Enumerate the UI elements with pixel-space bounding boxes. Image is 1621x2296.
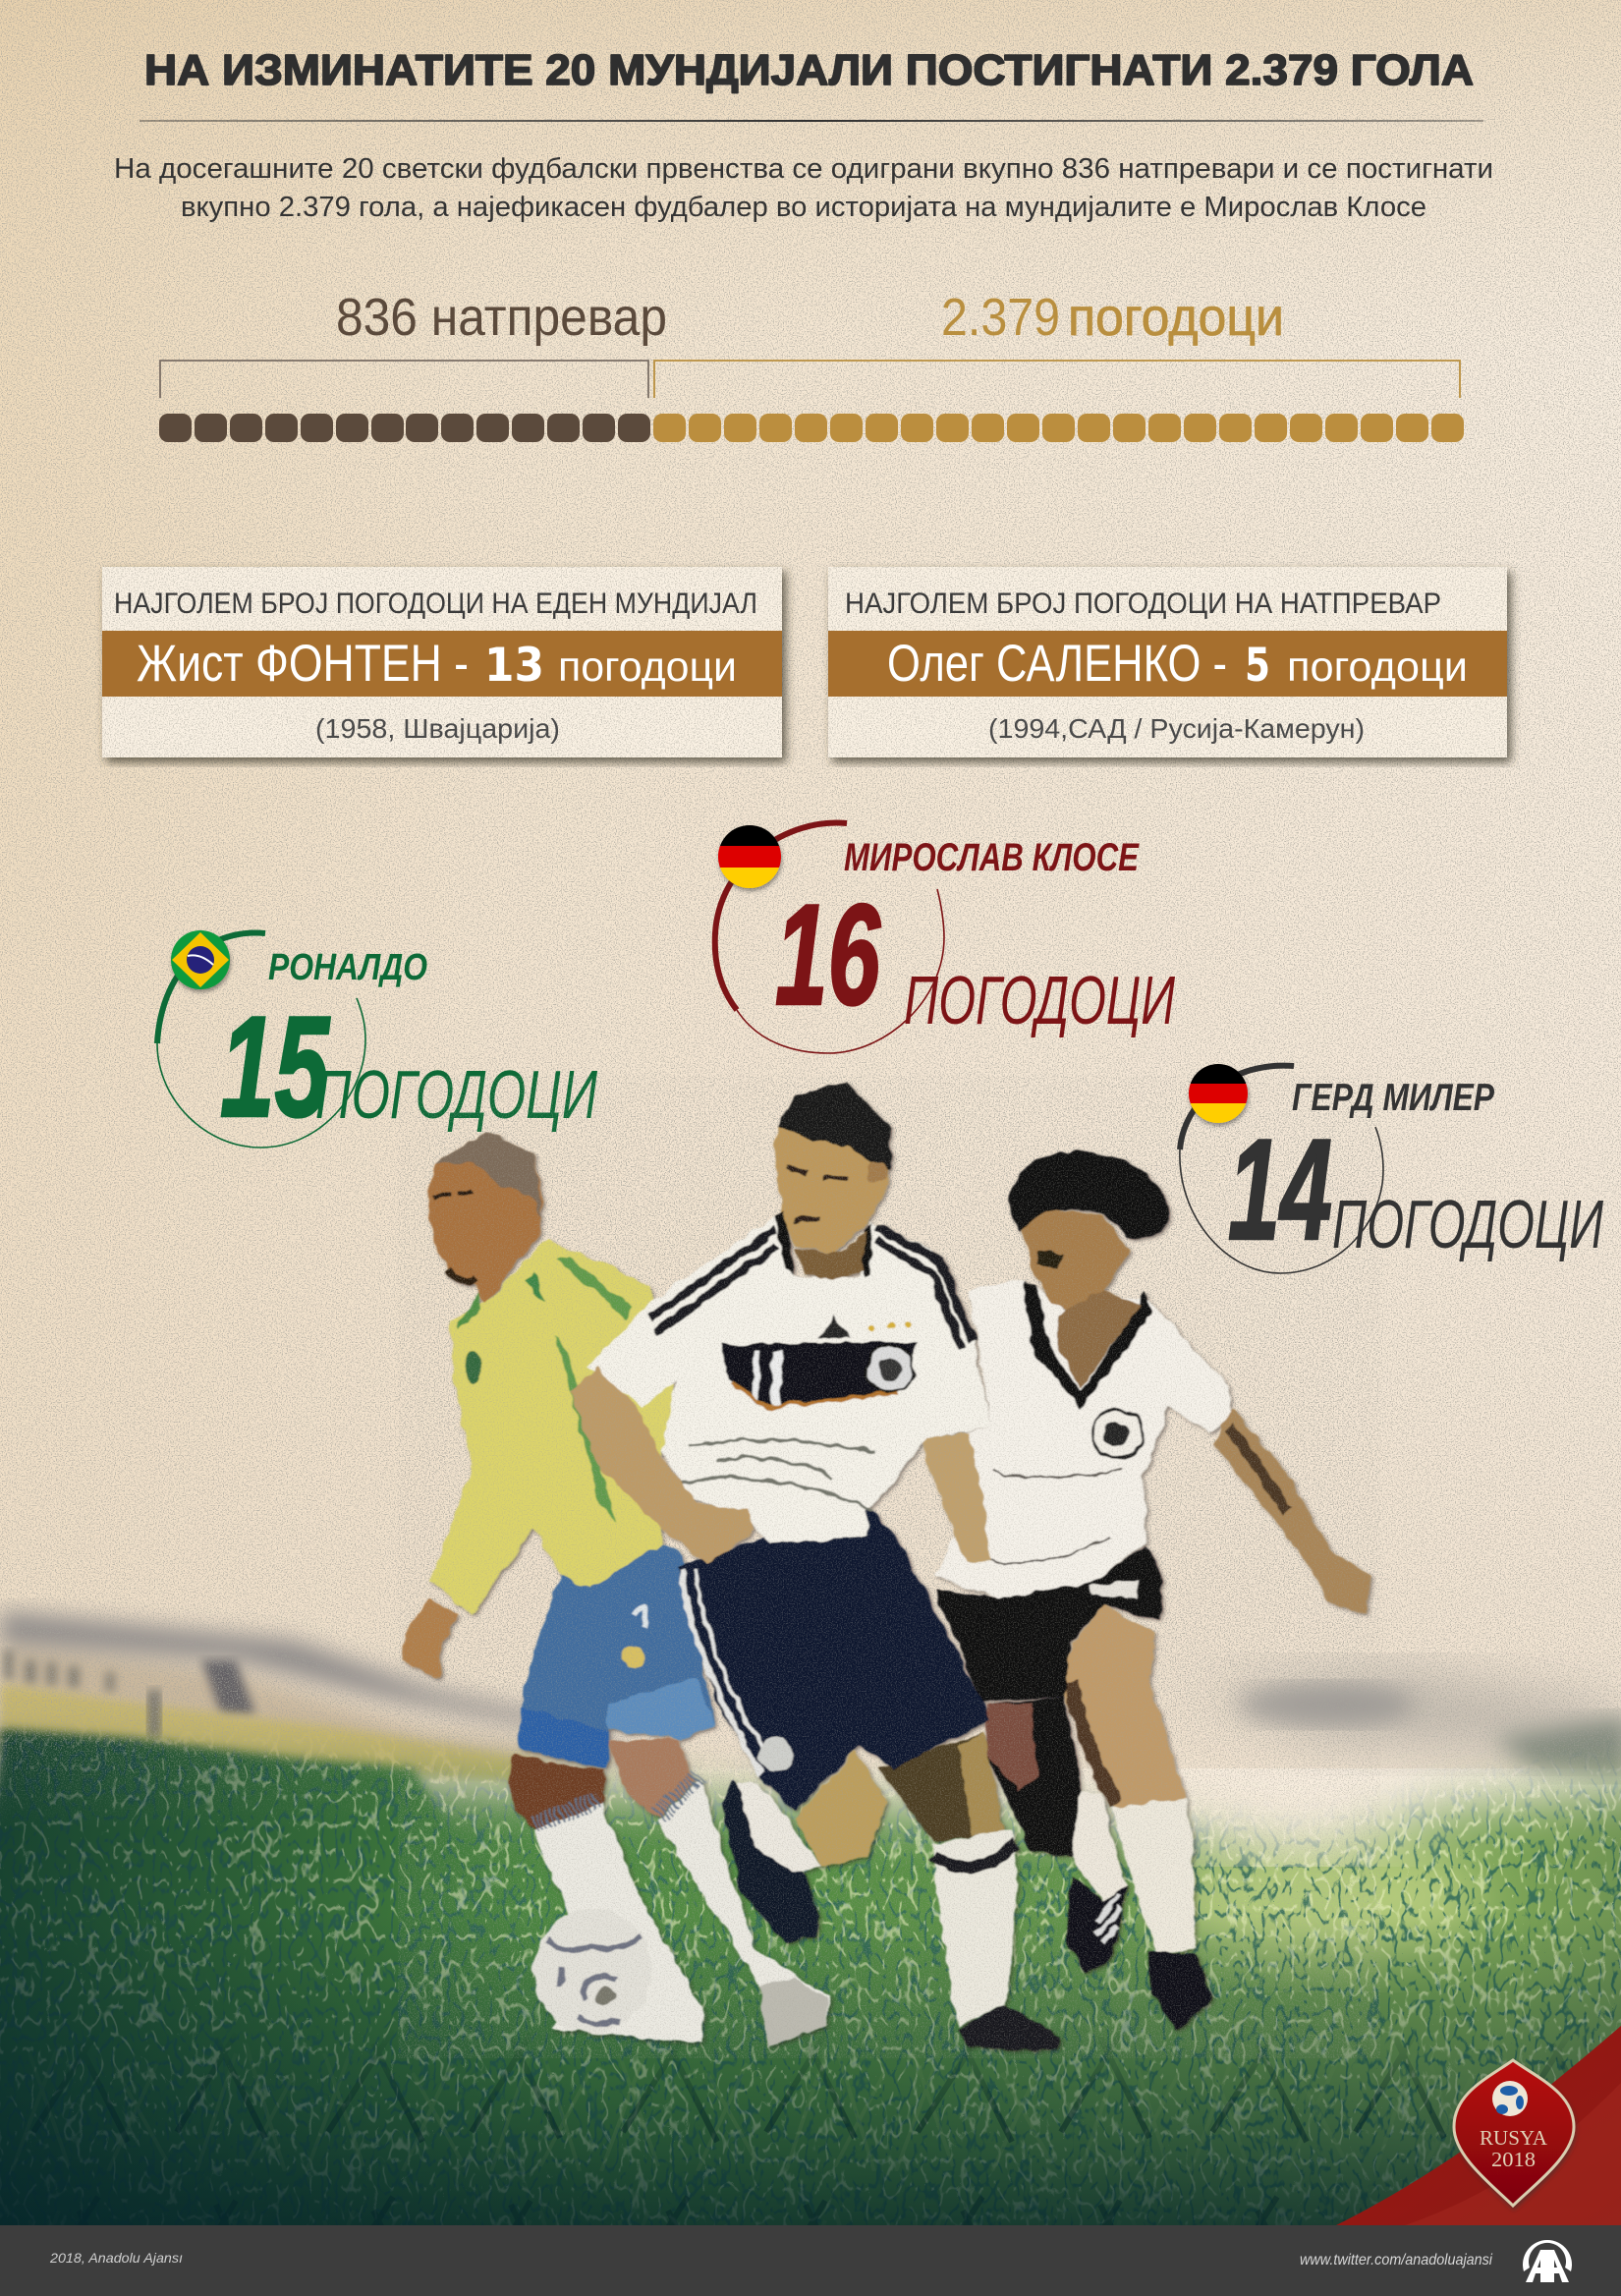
red corner ribbon (1336, 2026, 1621, 2225)
heading: НАЈГОЛЕМ БРОЈ ПОГОДОЦИ НА ЕДЕН МУНДИЈАЛ (114, 588, 757, 620)
heading: НАЈГОЛЕМ БРОЈ ПОГОДОЦИ НА НАТПРЕВАР (845, 588, 1441, 620)
record band: 13 (484, 639, 544, 693)
record band: погодоци (558, 644, 737, 691)
pills: matches (159, 414, 650, 442)
intro text (114, 153, 1493, 223)
icon: Anadolu Agency logo (1523, 2240, 1572, 2282)
players illustration (403, 1081, 1370, 2049)
icon: tournament emblem (1492, 2081, 1528, 2116)
bracket: goals (654, 361, 1460, 398)
name: РОНАЛДО (268, 947, 427, 988)
year and place: (1958, Швајцарија) (315, 713, 560, 744)
unit: ПОГОДОЦИ (315, 1056, 598, 1133)
label: matches: 836 натпревар (336, 288, 667, 347)
stat: Klose 16 goals (715, 822, 1176, 1053)
player: Klose (571, 1081, 1057, 2049)
badge: Russia 2018 (1454, 2060, 1574, 2206)
title: НА ИЗМИНАТИТЕ 20 МУНДИЈАЛИ ПОСТИГНАТИ 2.379 ГОЛА (144, 46, 1474, 94)
record band: погодоци (1287, 644, 1468, 691)
stat: Ronaldo 15 goals (157, 930, 598, 1148)
grass field (0, 1670, 1621, 2225)
footer bar (0, 2225, 1621, 2296)
flag: Germany (1189, 1064, 1248, 1123)
football (533, 1909, 651, 2033)
flag: Brazil (171, 930, 230, 989)
badge: Russia 2018: RUSYA (1480, 2126, 1548, 2150)
player: Ronaldo (403, 1133, 829, 2047)
intro text: вкупно 2.379 гола, а најефикасен фудбалер во историјата на мундијалите е Мирослав Клосе (181, 192, 1426, 223)
label: goals: погодоци (1068, 288, 1284, 347)
number: 16 (775, 874, 881, 1035)
blurred stadium in the distance (0, 1611, 1621, 1783)
panel: most goals in one tournament (102, 567, 782, 757)
pills: goals (653, 414, 1464, 442)
bracket: matches (160, 361, 648, 398)
intro text: На досегашните 20 светски фудбалски првенства се одиграни вкупно 836 натпревари и се постигнати (114, 153, 1493, 185)
label: goals (941, 288, 1284, 347)
panel: most goals in one match (828, 567, 1507, 757)
record band: Олег САЛЕНКО - (887, 635, 1227, 693)
name: ГЕРД МИЛЕР (1292, 1077, 1495, 1119)
unit: ПОГОДОЦИ (904, 962, 1176, 1038)
twitter link text: www.twitter.com/anadoluajansi (1300, 2252, 1492, 2268)
record band (828, 631, 1507, 697)
copyright: 2018, Anadolu Ajansı (49, 2250, 183, 2266)
badge: Russia 2018: 2018 (1491, 2148, 1536, 2171)
grain over players (398, 1076, 1380, 2058)
paper grain (0, 0, 1621, 1827)
player: Muller (936, 1152, 1370, 2032)
number: 15 (220, 986, 330, 1147)
record band: Жист ФОНТЕН - (137, 635, 469, 693)
stat: Muller 14 goals (1180, 1064, 1604, 1273)
number: 14 (1228, 1109, 1332, 1269)
label: goals: 2.379 (941, 288, 1060, 347)
name: МИРОСЛАВ КЛОСЕ (844, 836, 1140, 879)
matches vs goals bar (159, 288, 1464, 442)
record band (102, 631, 782, 697)
record band: 5 (1245, 639, 1270, 693)
flag: Germany (718, 825, 781, 889)
year and place: (1994,САД / Русија-Камерун) (988, 713, 1365, 744)
